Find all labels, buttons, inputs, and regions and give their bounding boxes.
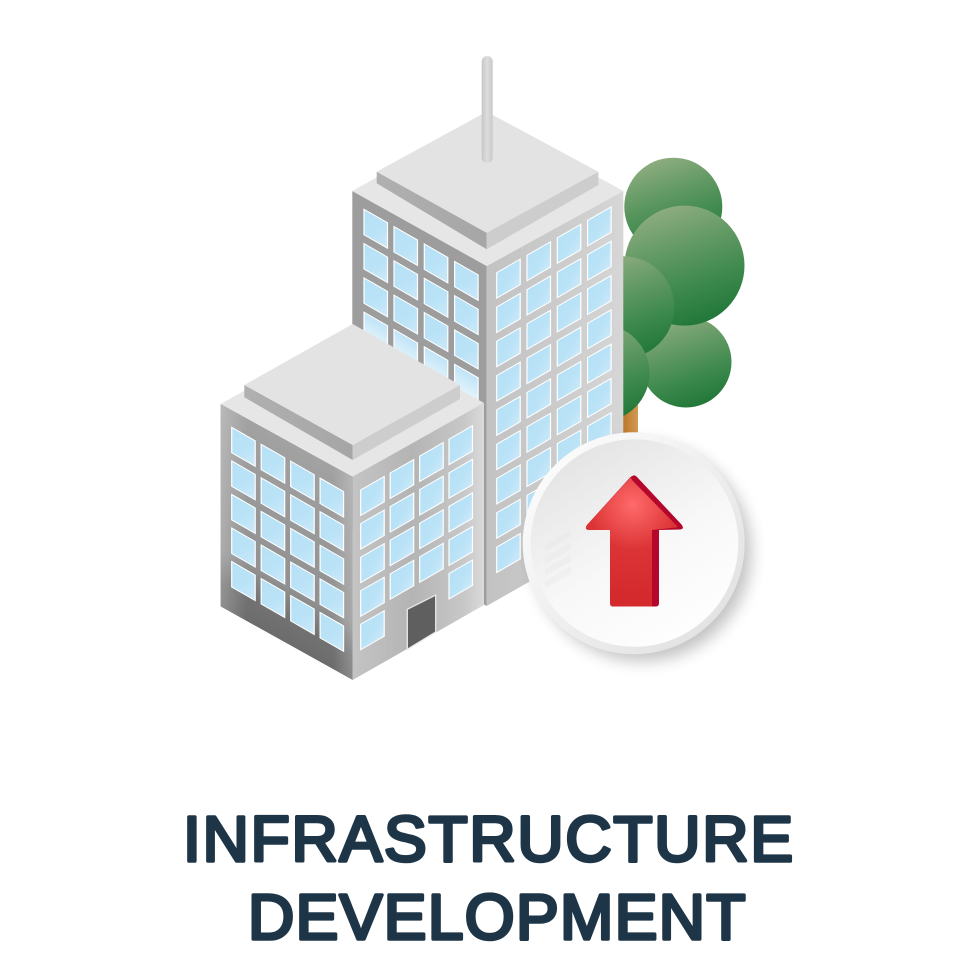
short building roof slab bbox=[244, 324, 460, 460]
short building roof bbox=[221, 330, 484, 477]
tall building right face bbox=[487, 191, 623, 606]
tree bbox=[552, 158, 744, 437]
title line 2: DEVELOPMENT bbox=[248, 881, 746, 953]
foliage bbox=[552, 158, 744, 421]
tall building roof bbox=[352, 116, 623, 266]
arrow dark side bbox=[586, 475, 683, 606]
badge shadow bbox=[533, 443, 751, 661]
tall building left face bbox=[352, 191, 487, 606]
tall building right windows bbox=[497, 207, 611, 572]
badge face bbox=[531, 439, 738, 647]
tall building bbox=[352, 56, 623, 606]
short building left windows bbox=[232, 427, 344, 651]
badge: growth arrow bbox=[523, 432, 751, 661]
red up arrow bbox=[586, 475, 683, 606]
arrow front face bbox=[586, 478, 677, 606]
tree trunk bbox=[622, 405, 638, 437]
tall building roof slab bbox=[377, 112, 598, 249]
short building right face bbox=[353, 403, 484, 680]
door bbox=[407, 595, 436, 649]
badge rim bbox=[523, 432, 745, 654]
short building right windows bbox=[361, 426, 472, 650]
title bbox=[183, 803, 793, 953]
short building left face bbox=[221, 404, 353, 680]
short building bbox=[221, 324, 484, 680]
title line 1: INFRASTRUCTURE bbox=[183, 803, 793, 875]
antenna bbox=[482, 56, 493, 163]
faint window reflection bbox=[545, 530, 571, 588]
tall building left windows bbox=[364, 209, 478, 403]
